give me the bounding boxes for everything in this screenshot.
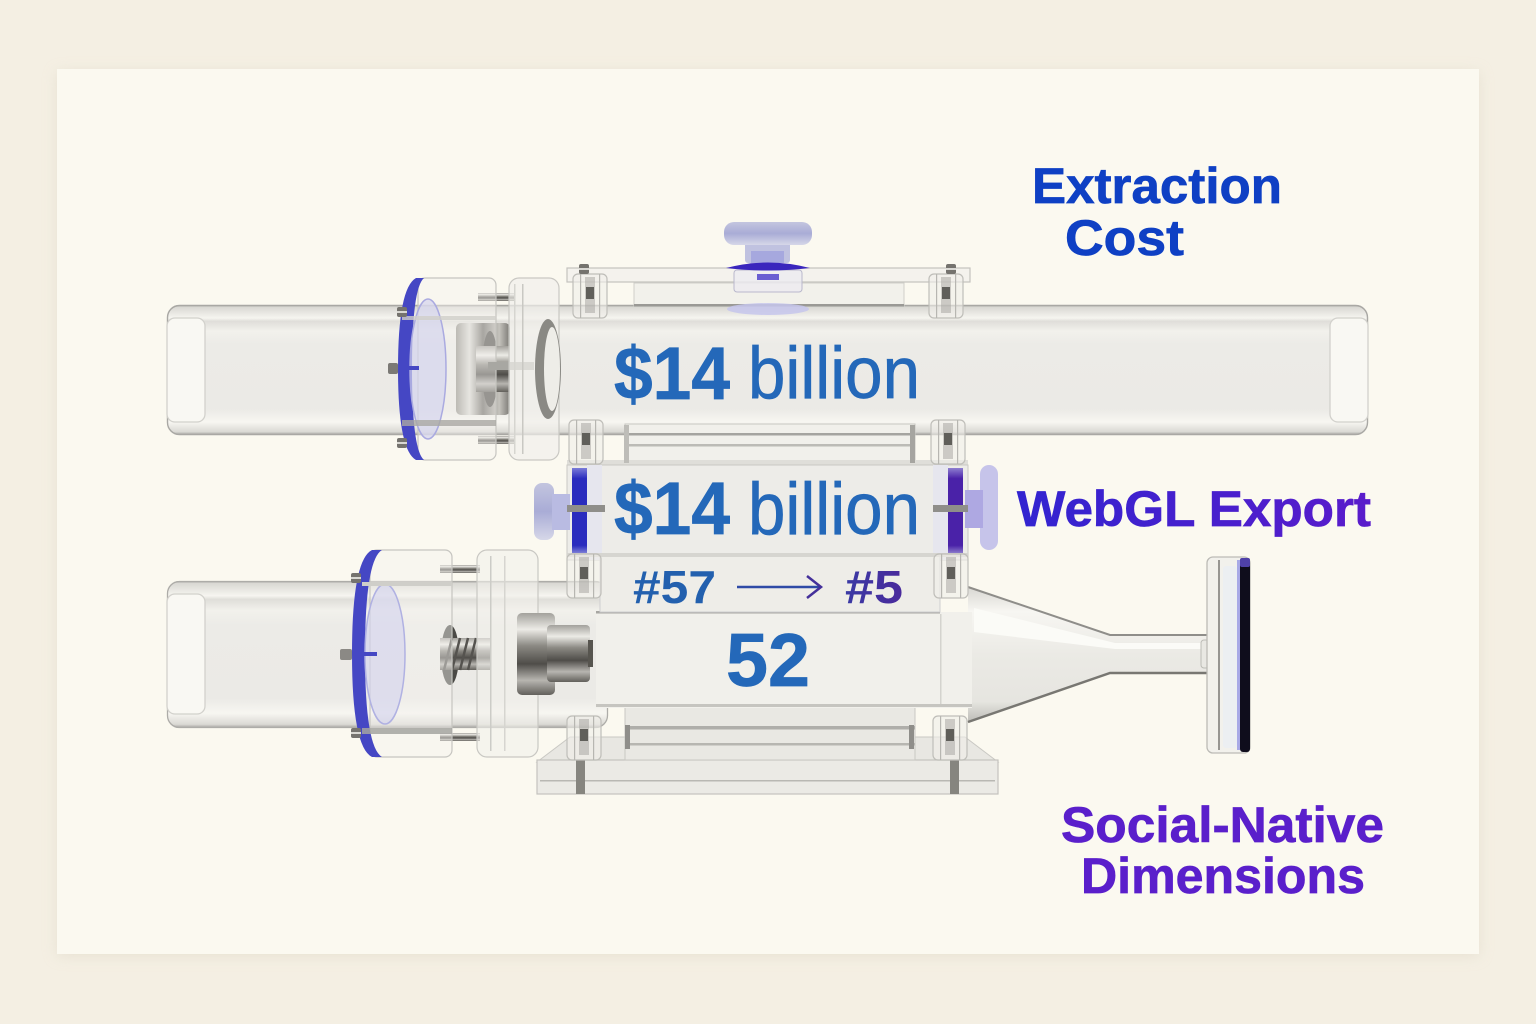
big value: $14 billion (top): $14	[614, 332, 730, 415]
panel shadow	[57, 72, 1479, 956]
clear flange body	[418, 278, 496, 460]
label: Social-Native Dimensions	[1061, 797, 1384, 904]
big value: $14 billion (chamber): $14	[614, 467, 730, 550]
stat: #57 to #5	[633, 561, 903, 613]
screen plate	[1207, 557, 1250, 753]
lower chamber	[567, 553, 972, 708]
lower rods	[440, 565, 490, 741]
lower left coupling	[340, 550, 593, 757]
top clamp with knob	[567, 222, 970, 318]
label: Social-Native Dimensions: Dimensions	[1081, 848, 1365, 904]
chamber body	[567, 465, 968, 560]
big value: 52: 52	[726, 618, 810, 702]
lower base plate	[537, 737, 998, 794]
blue flange disc	[388, 278, 534, 460]
big value: $14 billion (chamber)	[614, 467, 920, 550]
steel bearing	[517, 613, 593, 695]
heading: Extraction Cost: Cost	[1065, 210, 1184, 266]
label: Social-Native Dimensions: Social-Native	[1061, 797, 1384, 853]
clear flange body	[370, 550, 452, 757]
right purple knob	[933, 465, 998, 560]
big value: $14 billion (top): billion	[748, 333, 920, 414]
top glass tube	[167, 305, 1368, 435]
big value: $14 billion (chamber): billion	[748, 469, 920, 550]
big value: $14 billion (top)	[614, 332, 920, 415]
blue flange disc	[340, 550, 452, 757]
purple knob	[724, 222, 812, 315]
top left coupling	[388, 278, 561, 460]
rank to: #5	[845, 561, 903, 613]
arrow	[737, 576, 821, 598]
middle chamber	[534, 420, 998, 560]
rank from: #57	[633, 561, 716, 613]
heading: Extraction Cost: Extraction	[1032, 158, 1282, 214]
left blue knob	[534, 465, 605, 560]
heading: Extraction Cost	[1032, 158, 1282, 266]
label: WebGL Export: WebGL Export	[1017, 481, 1371, 537]
steel hub	[456, 323, 510, 415]
threaded shaft	[440, 625, 490, 685]
second clear flange	[477, 550, 538, 757]
lower glass tube	[167, 581, 608, 728]
tie rods	[478, 293, 514, 444]
funnel nozzle	[968, 587, 1209, 722]
clamp plate	[567, 264, 970, 318]
lower clamp	[567, 705, 967, 760]
second clear flange	[509, 278, 561, 460]
chamber top clamp	[567, 420, 968, 466]
